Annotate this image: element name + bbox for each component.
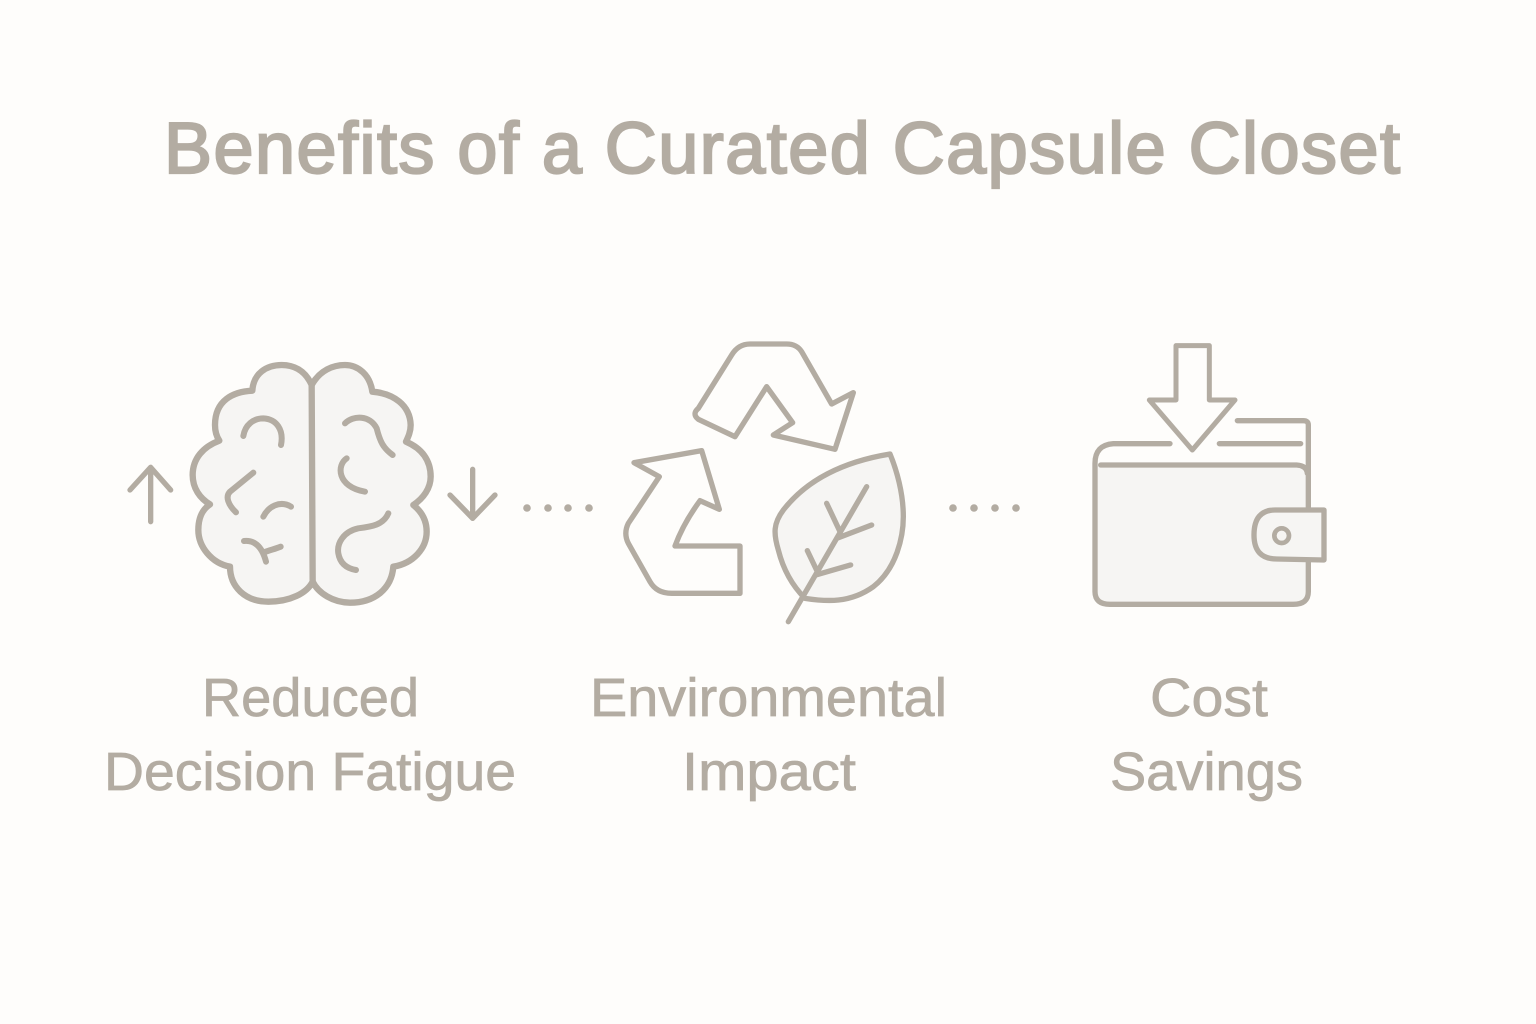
arrow into wallet <box>1149 346 1235 450</box>
label: environmental impact: Environmental <box>590 668 947 728</box>
wallet clasp <box>1254 510 1324 560</box>
icon: brain <box>193 365 431 603</box>
label: reduced decision fatigue: Reduced <box>202 668 419 728</box>
label: cost savings: Cost <box>1150 668 1268 728</box>
icon: up arrow <box>130 467 171 522</box>
wallet body <box>1095 421 1308 604</box>
recycling arrow top <box>695 344 853 449</box>
dotted connector left <box>523 504 593 512</box>
label: reduced decision fatigue: Decision Fatigue <box>104 742 516 802</box>
label: cost savings <box>1110 668 1303 802</box>
icon: recycling arrows and leaf <box>626 344 903 622</box>
leaf <box>775 454 903 622</box>
recycling arrow left <box>626 451 740 593</box>
icon: wallet with down arrow <box>1095 346 1324 604</box>
label: environmental impact <box>590 668 947 802</box>
icon: down arrow <box>450 469 495 518</box>
title: Benefits of a Curated Capsule Closet <box>164 109 1400 189</box>
label: cost savings: Savings <box>1110 742 1303 802</box>
label: environmental impact: Impact <box>682 742 856 802</box>
label: reduced decision fatigue <box>104 668 516 802</box>
dotted connector right <box>949 504 1020 512</box>
